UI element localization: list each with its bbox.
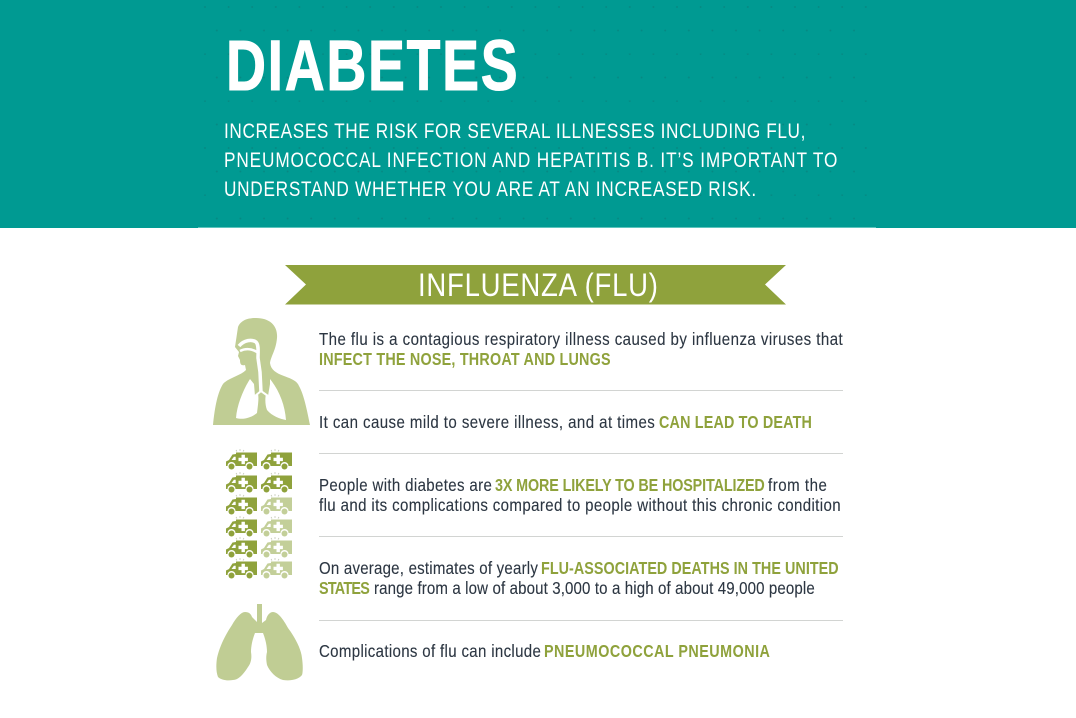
icon: lungs [216, 604, 303, 680]
text block: complications [319, 642, 770, 661]
text block: hospitalization [319, 476, 841, 515]
text block: infection: INFECT THE NOSE, THROAT AND LUNGS [319, 351, 611, 369]
intro text [224, 121, 837, 201]
text block: yearly deaths: FLU-ASSOCIATED DEATHS IN THE UNITED [541, 560, 839, 578]
text block: severity [319, 413, 812, 432]
text block: hospitalization: 3X MORE LIKELY TO BE HOSPITALIZED [495, 477, 765, 495]
section ribbon: influenza: INFLUENZA (FLU) [418, 268, 658, 304]
text block: hospitalization: flu and its complications compared to people without this chronic condition [319, 496, 841, 515]
text block: complications: PNEUMOCOCCAL PNEUMONIA [544, 643, 770, 661]
text block: hospitalization: People with diabetes are [319, 476, 492, 495]
icon: human respiratory system [213, 318, 310, 425]
intro text: UNDERSTAND WHETHER YOU ARE AT AN INCREASED RISK. [224, 179, 756, 201]
text block: infection: The flu is a contagious respiratory illness caused by influenza viruses that [319, 330, 843, 349]
intro text: PNEUMOCOCCAL INFECTION AND HEPATITIS B. IT’S IMPORTANT TO [224, 150, 837, 172]
icon: ambulance grid, 3 times more likely [226, 449, 292, 578]
text block: yearly deaths [319, 559, 839, 598]
title: DIABETES [226, 26, 518, 106]
text block: hospitalization: from the [768, 476, 827, 495]
text block: complications: Complications of flu can include [319, 642, 541, 661]
text block: yearly deaths: range from a low of about 3,000 to a high of about 49,000 people [374, 579, 815, 598]
section ribbon: influenza [285, 265, 786, 304]
header banner [0, 0, 1076, 228]
text block: severity: It can cause mild to severe illness, and at times [319, 413, 655, 432]
text block: infection [319, 330, 843, 369]
intro text: INCREASES THE RISK FOR SEVERAL ILLNESSES INCLUDING FLU, [224, 121, 805, 143]
text block: severity: CAN LEAD TO DEATH [659, 414, 812, 432]
text block: yearly deaths: STATES [319, 580, 370, 598]
text block: yearly deaths: On average, estimates of yearly [319, 559, 539, 578]
